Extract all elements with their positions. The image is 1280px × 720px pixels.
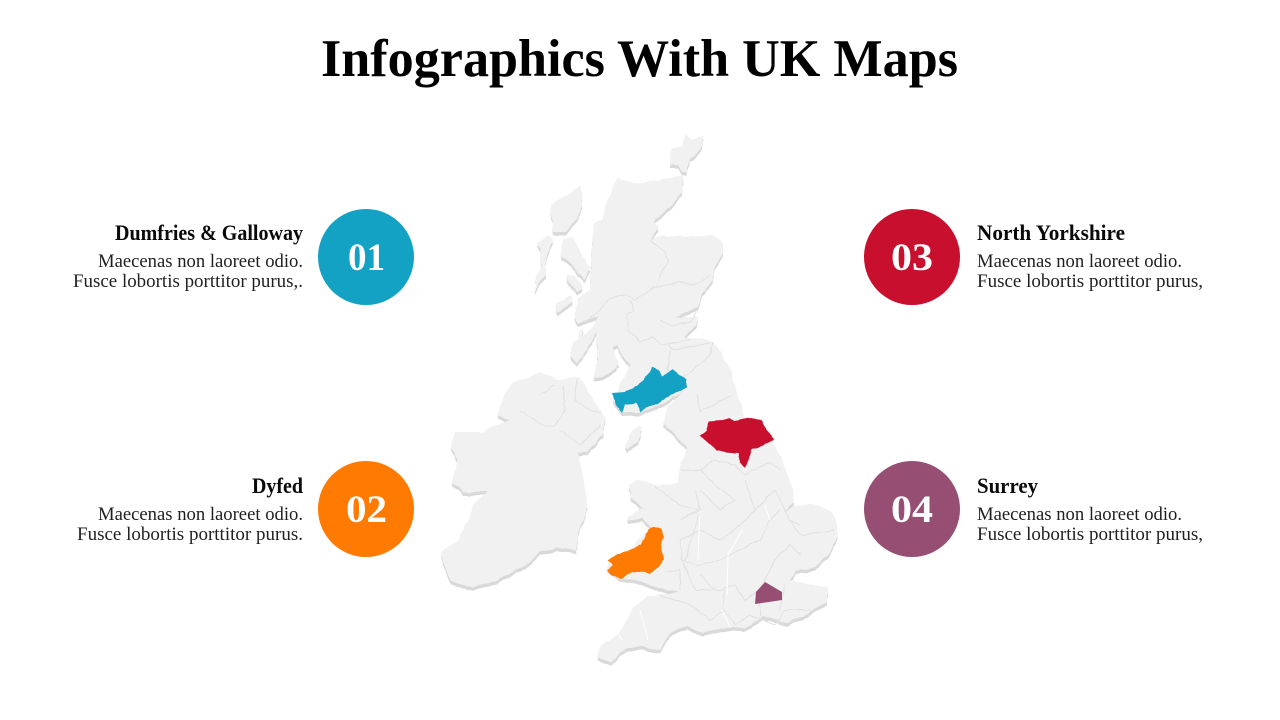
badge 01 xyxy=(318,209,414,305)
region: Dyfed xyxy=(607,528,664,579)
land: Anglesey xyxy=(627,512,642,520)
land: Isle of Man xyxy=(625,426,642,449)
land: Orkney and Shetland xyxy=(670,134,703,172)
land: Mull and Inner Hebrides xyxy=(555,274,582,312)
body 02: Fusce lobortis porttitor purus. xyxy=(77,524,303,545)
map: UK and Ireland xyxy=(440,134,837,662)
region: Dumfries and Galloway xyxy=(612,367,687,413)
badge 04 xyxy=(864,461,960,557)
body 04: Fusce lobortis porttitor purus, xyxy=(977,524,1203,545)
heading 03: North Yorkshire xyxy=(977,220,1125,245)
body 01: Fusce lobortis porttitor purus,. xyxy=(73,271,303,292)
body 03 xyxy=(977,251,1203,292)
badge 04: 04 xyxy=(891,488,933,531)
badge 03: 03 xyxy=(891,236,933,279)
land: Outer Hebrides xyxy=(534,186,582,293)
heading 02: Dyfed xyxy=(252,473,303,498)
body 04: Maecenas non laoreet odio. xyxy=(977,504,1182,525)
land: Arran and Islay xyxy=(578,328,620,368)
badge 01: 01 xyxy=(348,236,385,279)
body 01 xyxy=(73,251,303,292)
land: Skye xyxy=(561,236,590,280)
land: Great Britain mainland xyxy=(570,175,837,662)
heading 04: Surrey xyxy=(977,473,1039,498)
county borders xyxy=(520,240,835,625)
body 03: Fusce lobortis porttitor purus, xyxy=(977,271,1203,292)
body 04 xyxy=(977,504,1203,545)
body 02: Maecenas non laoreet odio. xyxy=(98,504,303,525)
body 01: Maecenas non laoreet odio. xyxy=(98,251,303,272)
item 01: Dumfries & Galloway xyxy=(73,209,414,305)
white county gaps xyxy=(613,505,770,640)
badge 02 xyxy=(318,461,414,557)
item 03: North Yorkshire xyxy=(864,209,1203,305)
land: Ireland xyxy=(440,372,605,588)
badge 02: 02 xyxy=(346,488,387,531)
title: Infographics With UK Maps xyxy=(321,30,958,88)
map land masses xyxy=(440,134,837,662)
item 04: Surrey xyxy=(864,461,1203,557)
body 02 xyxy=(77,504,303,545)
heading 01: Dumfries & Galloway xyxy=(115,220,304,245)
region: Surrey xyxy=(755,582,782,604)
item 02: Dyfed xyxy=(77,461,414,557)
region: North Yorkshire xyxy=(700,418,774,468)
body 03: Maecenas non laoreet odio. xyxy=(977,251,1182,272)
badge 03 xyxy=(864,209,960,305)
